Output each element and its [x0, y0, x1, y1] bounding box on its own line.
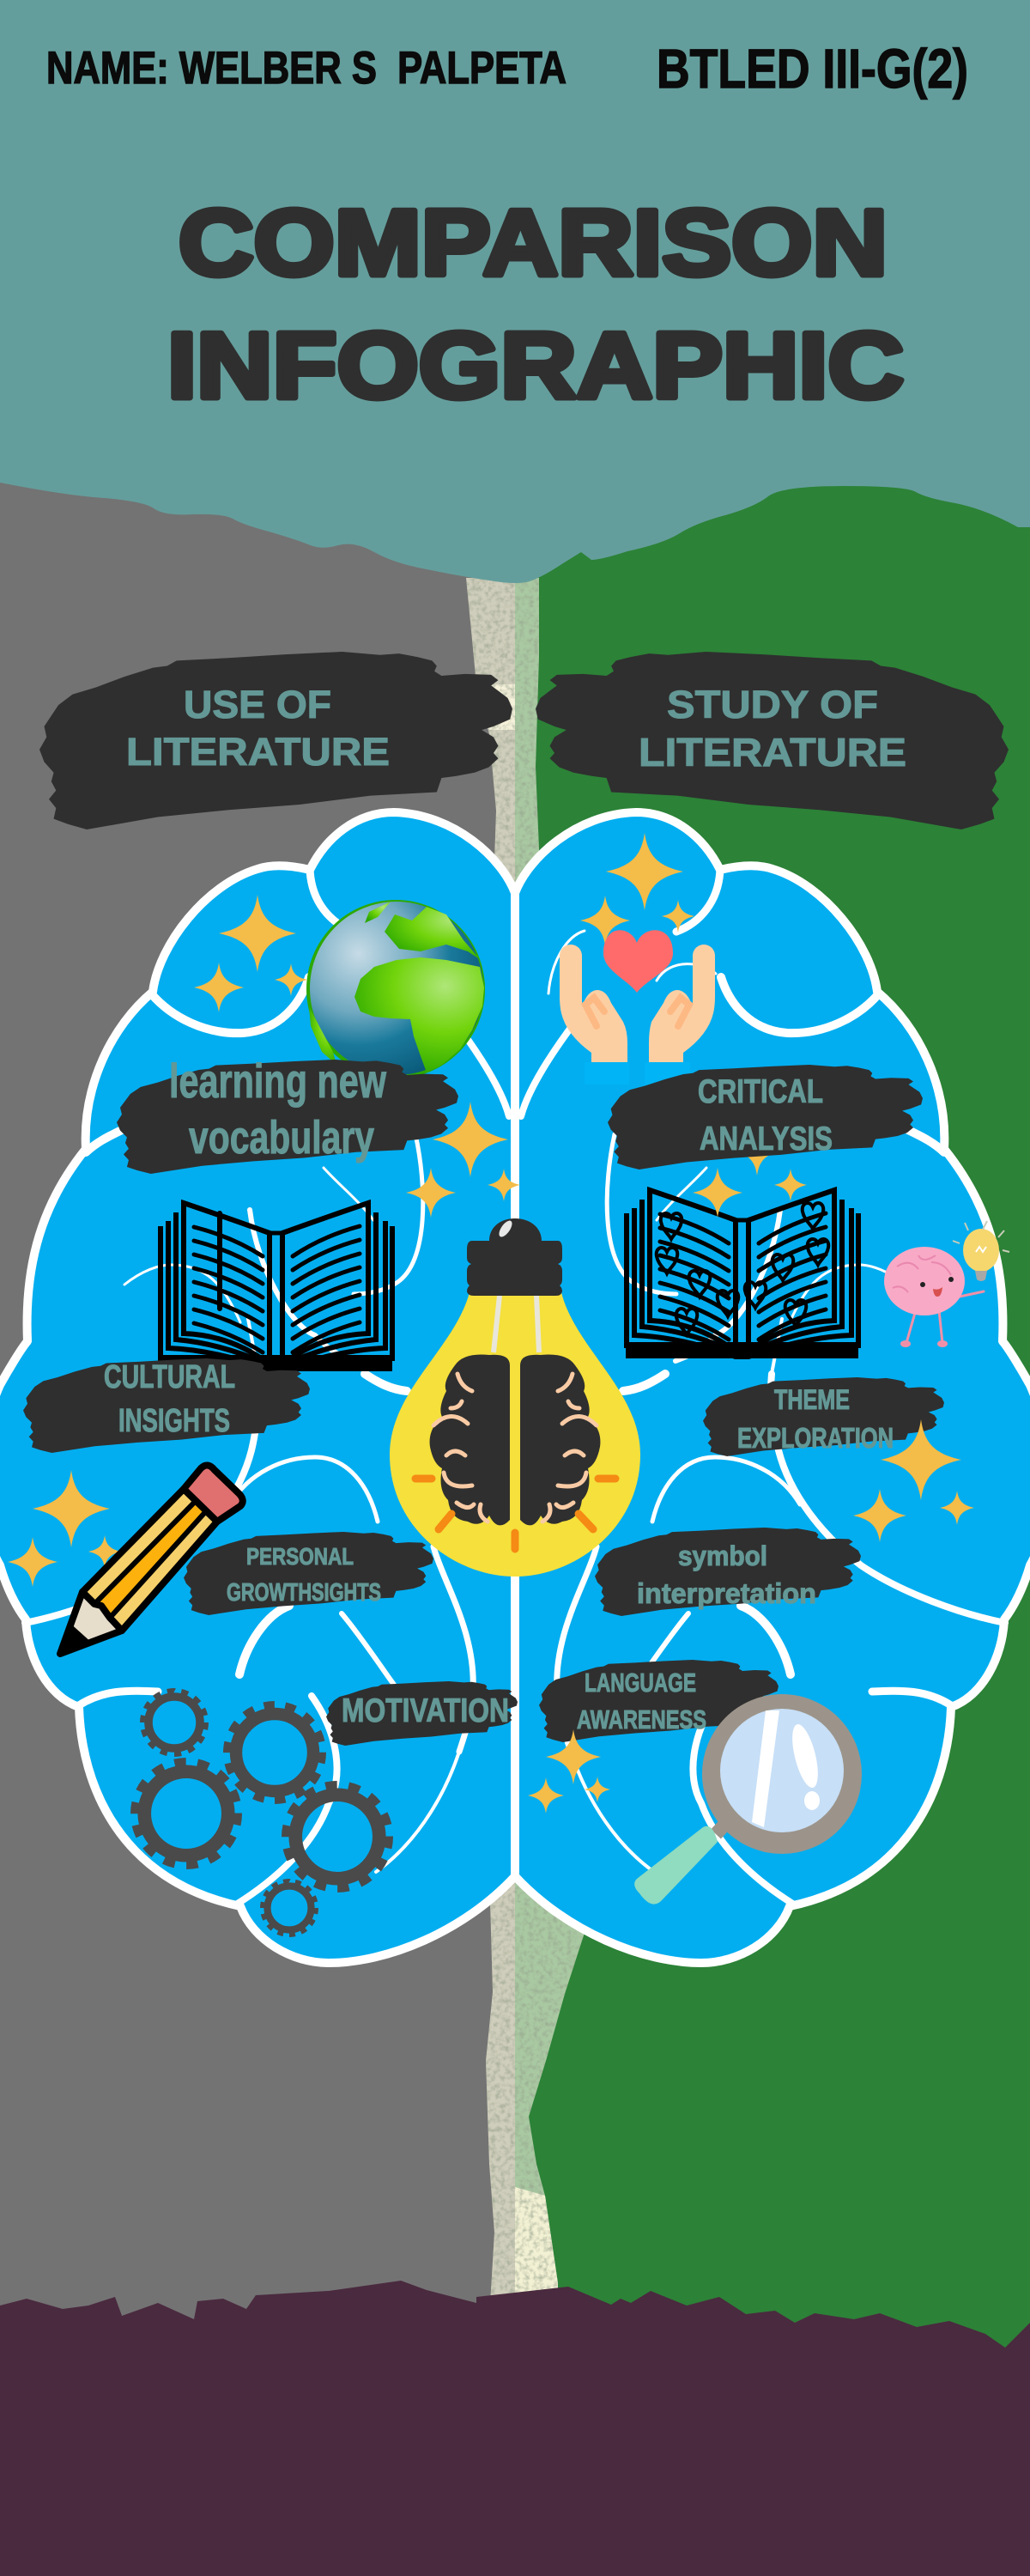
icon: hands holding heart: [560, 930, 715, 1084]
heading blob: study of literature: STUDY OF: [667, 683, 878, 726]
label: theme exploration: [703, 1377, 944, 1456]
label: learning new vocabulary: [117, 1054, 458, 1174]
label: learning new vocabulary: learning new: [169, 1054, 386, 1108]
heading blob: use of literature: USE OF: [184, 683, 331, 726]
icon: open book (left): [160, 1203, 392, 1371]
heading blob: study of literature: LITERATURE: [639, 730, 906, 775]
label: personal growthsights: [184, 1532, 433, 1615]
label: critical analysis: ANALYSIS: [700, 1121, 833, 1157]
label: symbol interpretation: [595, 1528, 861, 1616]
label: language awareness: [539, 1660, 779, 1742]
icon: magnifying glass: [634, 1694, 862, 1905]
label: learning new vocabulary: vocabulary: [189, 1112, 374, 1163]
heading blob: use of literature: LITERATURE: [126, 730, 390, 774]
label: language awareness: LANGUAGE: [585, 1668, 696, 1698]
icon: pencil: [60, 1465, 243, 1654]
green right background: [515, 429, 1030, 2404]
sparkle stars: [8, 833, 782, 1587]
label: cultural insights: INSIGHTS: [118, 1403, 230, 1439]
sparkle stars over labels: [528, 1419, 974, 1814]
icon: gears: [136, 1692, 388, 1935]
icon: lightbulb with brain: [390, 1218, 640, 1577]
label: cultural insights: CULTURAL: [104, 1359, 235, 1395]
brain diagram background: [0, 812, 1030, 1963]
icon: globe: [306, 900, 485, 1078]
heading blob: study of literature: [536, 652, 1009, 829]
label: cultural insights: [23, 1358, 310, 1453]
label: language awareness: AWARENESS: [577, 1704, 706, 1735]
label: personal growthsights: PERSONAL: [246, 1543, 354, 1570]
title: INFOGRAPHIC: [167, 313, 904, 418]
plum footer band: [0, 2281, 1030, 2576]
title: COMPARISON: [179, 191, 888, 295]
label: symbol interpretation: symbol: [678, 1540, 767, 1571]
teal header band: [0, 0, 1030, 583]
label: motivation: MOTIVATION: [342, 1692, 509, 1729]
label: theme exploration: EXPLORATION: [737, 1422, 894, 1454]
label: theme exploration: THEME: [774, 1384, 850, 1415]
heading blob: use of literature: [39, 652, 512, 829]
student name: NAME: WELBER S PALPETA: [46, 43, 566, 94]
label: critical analysis: [608, 1065, 923, 1170]
label: symbol interpretation: interpretation: [637, 1577, 816, 1609]
torn paper strip: lower: [486, 1872, 592, 2318]
torn paper strip: upper: [466, 578, 542, 910]
gray left background: [0, 429, 515, 2404]
icon: open book with hearts (right): [626, 1168, 858, 1358]
label: motivation: [326, 1681, 518, 1746]
icon: small pink brain character: [884, 1221, 1009, 1347]
label: personal growthsights: GROWTHSIGHTS: [227, 1579, 381, 1607]
title: [167, 191, 904, 418]
label: critical analysis: CRITICAL: [698, 1073, 823, 1110]
class section: BTLED III-G(2): [657, 38, 968, 100]
